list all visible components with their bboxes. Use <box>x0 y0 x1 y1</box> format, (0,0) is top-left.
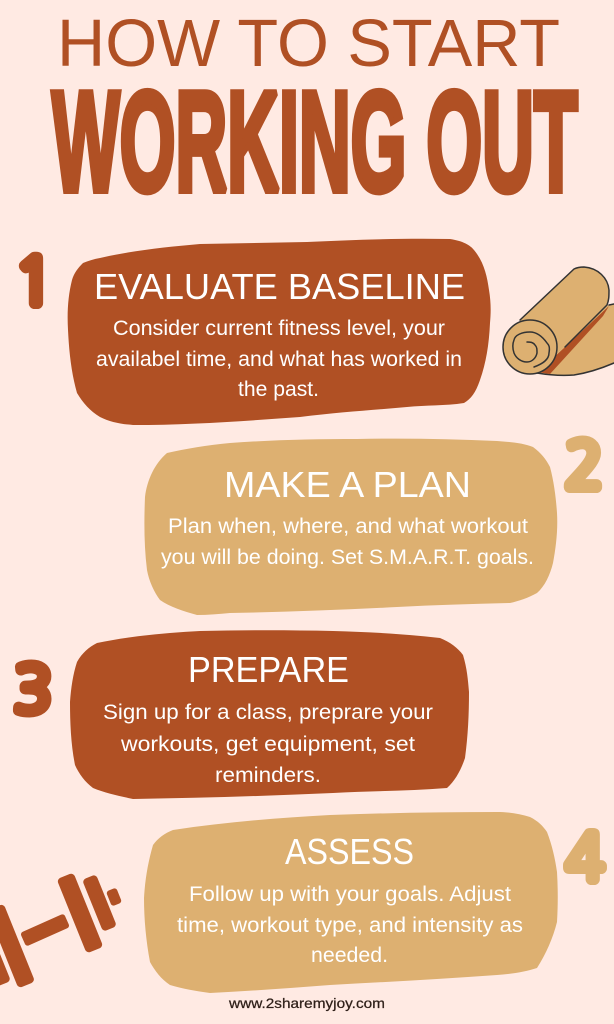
step 3 <box>14 630 469 799</box>
website credit: www.2sharemyjoy.com <box>228 995 385 1011</box>
body text: Plan when, where, and what workout <box>168 514 528 538</box>
step 4 <box>144 812 604 993</box>
body text: availabel time, and what has worked in <box>96 347 462 371</box>
panel: prepare <box>70 630 469 799</box>
number 3: 3 <box>14 659 52 722</box>
title line: how to start: HOW TO START <box>57 6 560 81</box>
number 4: 4 <box>566 827 604 890</box>
body text: Sign up for a class, preprare your <box>103 700 433 724</box>
title <box>52 6 578 221</box>
panel: assess <box>144 812 558 993</box>
body text <box>96 316 462 401</box>
body text: Consider current fitness level, your <box>113 316 445 340</box>
icon: dumbbell <box>0 873 122 988</box>
icon: rolled yoga mat <box>503 267 614 375</box>
body text: the past. <box>238 377 319 401</box>
body text: reminders. <box>215 763 321 787</box>
panel: make a plan <box>144 439 557 615</box>
heading: PREPARE <box>188 649 349 690</box>
heading: EVALUATE BASELINE <box>94 266 465 307</box>
heading: MAKE A PLAN <box>224 464 471 505</box>
panel: evaluate baseline <box>68 239 491 425</box>
body text: needed. <box>311 943 388 967</box>
body text: workouts, get equipment, set <box>120 732 415 756</box>
title line: working out: WORKING OUT <box>52 62 578 221</box>
body text: you will be doing. Set S.M.A.R.T. goals. <box>161 545 534 569</box>
body text: Follow up with your goals. Adjust <box>189 882 511 906</box>
step 2 <box>144 435 603 615</box>
heading: ASSESS <box>285 831 414 872</box>
body text <box>103 700 433 787</box>
body text: time, workout type, and intensity as <box>177 913 523 937</box>
step 1 <box>15 239 491 425</box>
number 1: 1 <box>15 251 53 314</box>
number 2: 2 <box>565 435 603 498</box>
body text <box>161 514 534 569</box>
body text <box>177 882 523 967</box>
